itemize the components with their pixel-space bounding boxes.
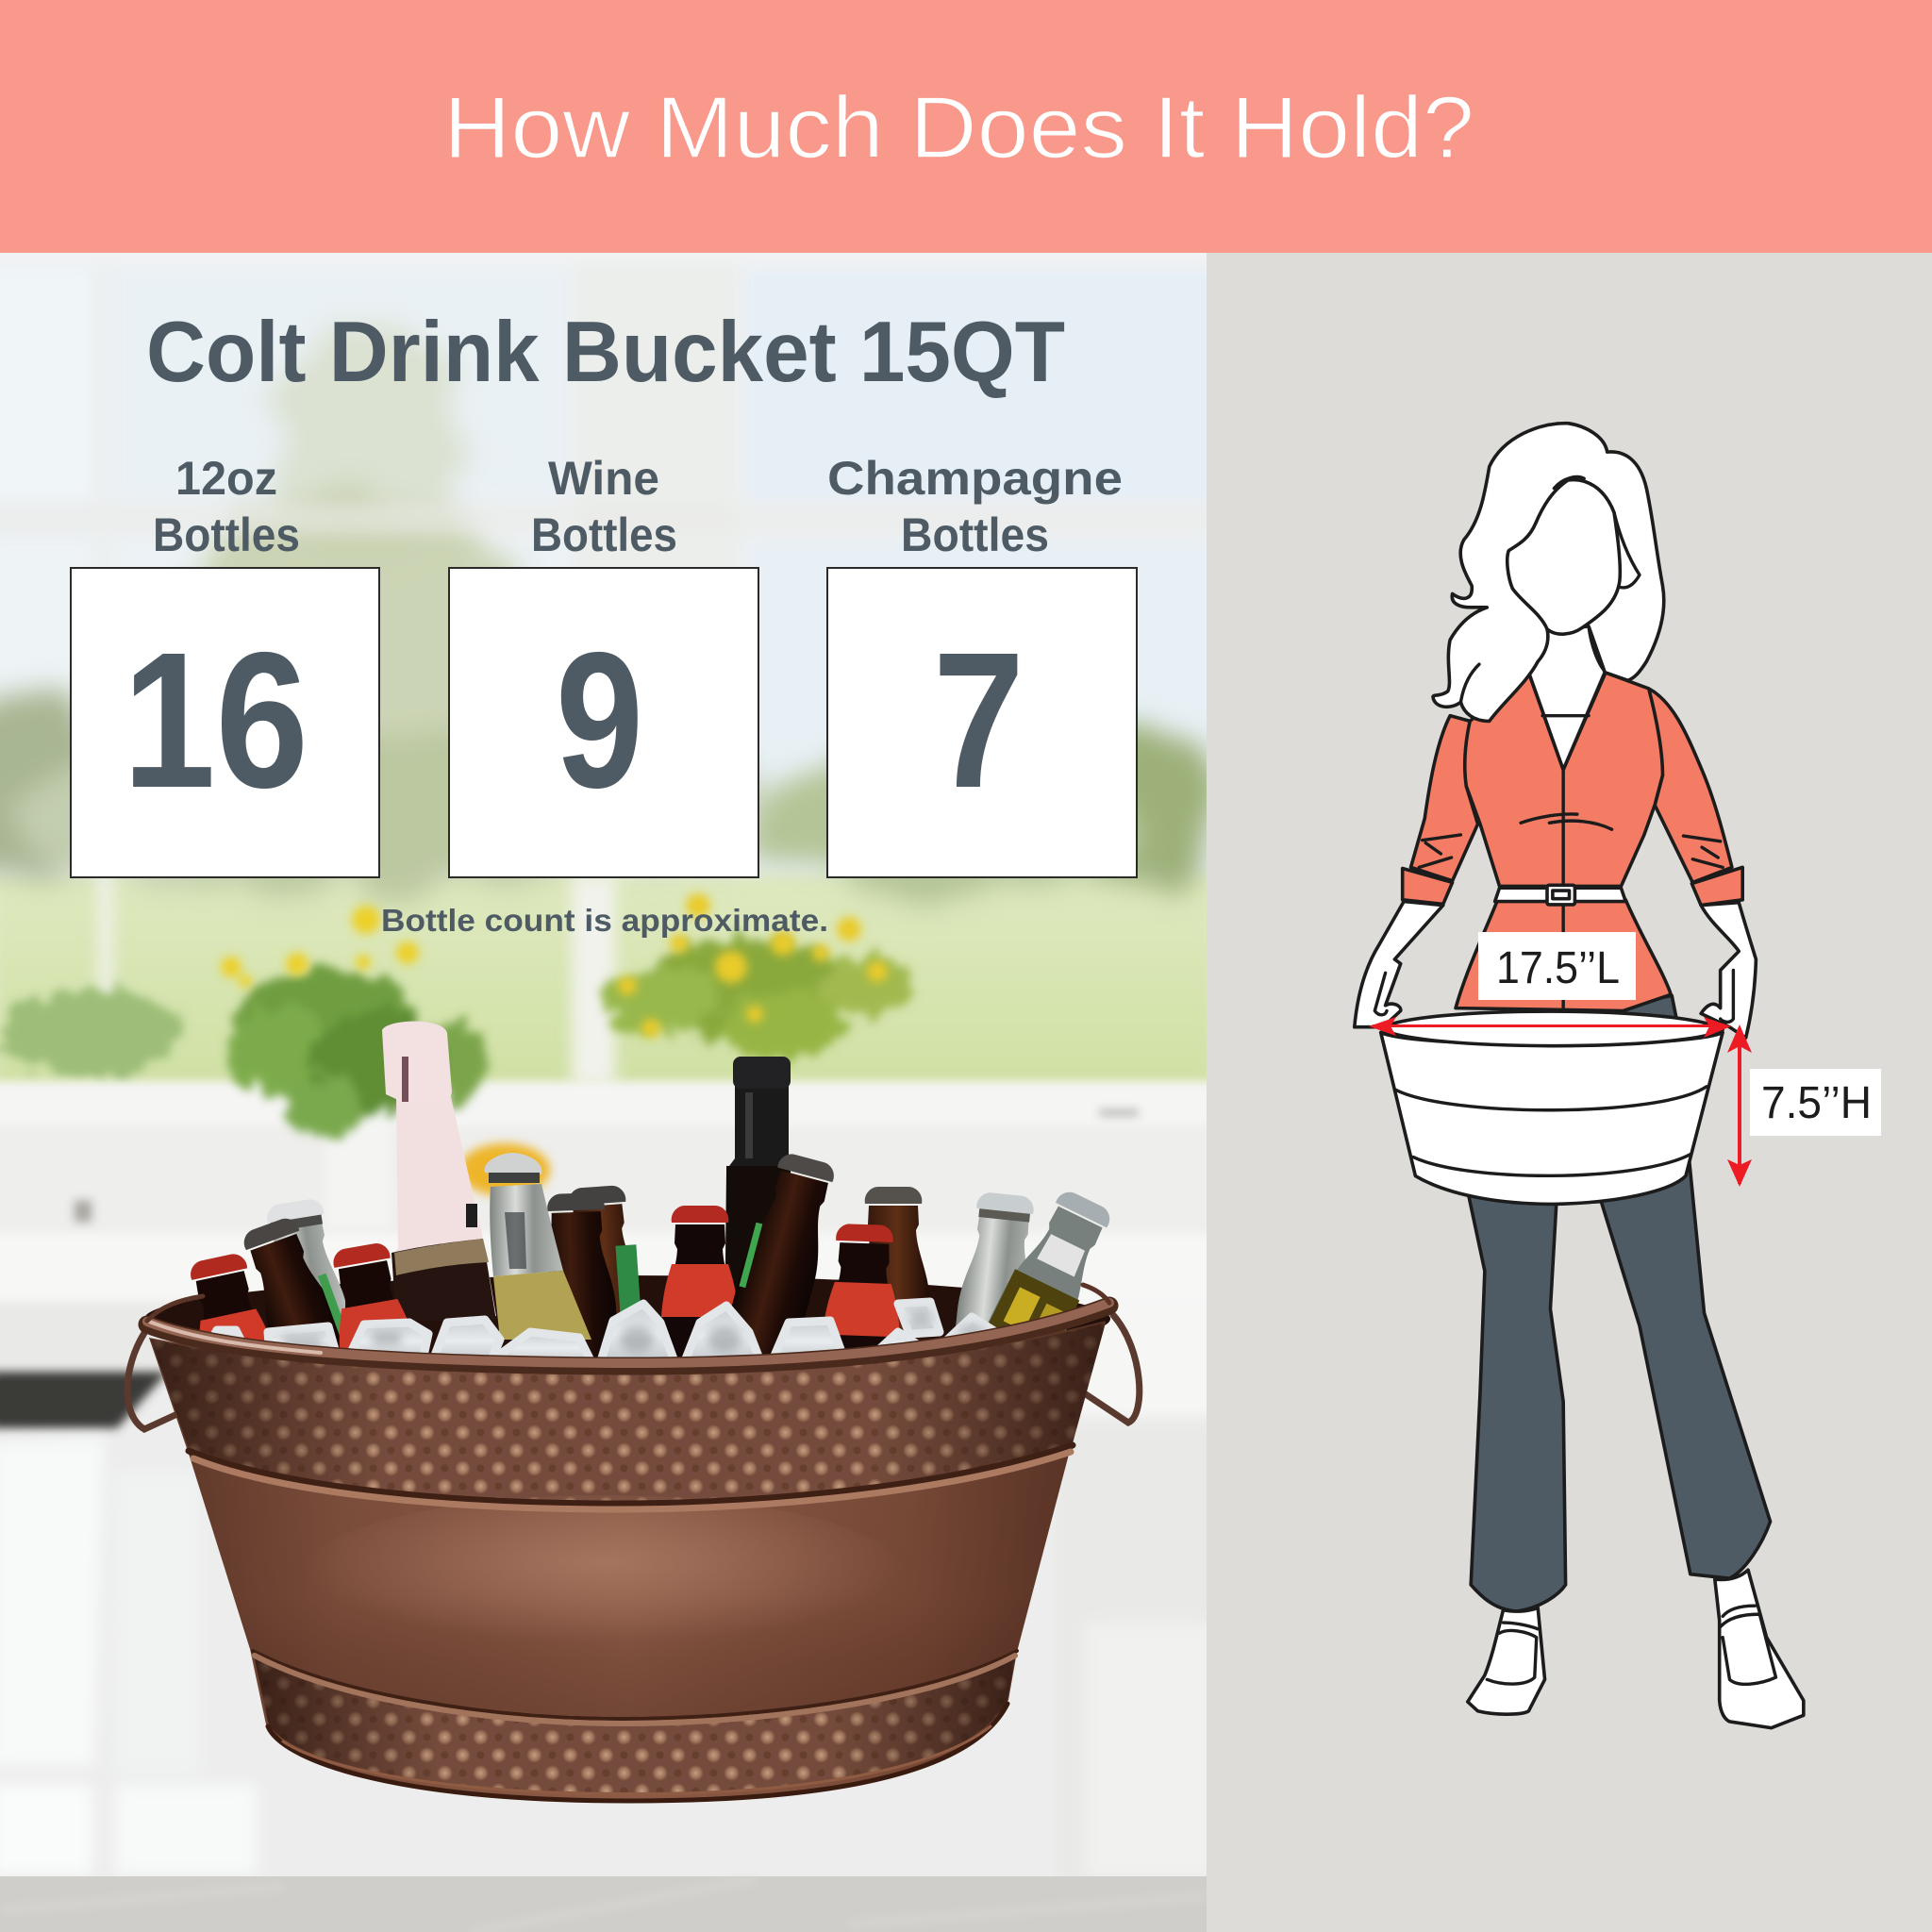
red label bottle right xyxy=(818,1224,904,1461)
right shoe xyxy=(1715,1570,1804,1728)
arrow: length xyxy=(1369,1017,1731,1038)
label: Wine Bottles xyxy=(531,452,677,561)
title: How Much Does It Hold? xyxy=(443,78,1474,176)
trousers xyxy=(1459,1149,1771,1611)
label: Champagne Bottles xyxy=(827,452,1123,561)
blurred trees xyxy=(0,321,1226,891)
undershirt and neck xyxy=(1528,626,1606,770)
label: 7.5 H: 7.5’’H xyxy=(1761,1078,1872,1128)
face xyxy=(1460,477,1640,702)
label: 12oz Bottles: 12oz xyxy=(175,452,277,505)
panel: size guide background xyxy=(1207,253,1932,1932)
lemons xyxy=(459,1143,550,1196)
clear bottle with beer xyxy=(484,1153,591,1340)
tub xyxy=(1381,1011,1723,1204)
count box: 7 xyxy=(827,568,1137,877)
wine bottle black xyxy=(724,1057,791,1340)
label: 17.5 L: 17.5’’L xyxy=(1496,943,1620,993)
hammered upper band xyxy=(151,1323,1106,1502)
count box: 9 xyxy=(449,568,758,877)
left sleeve xyxy=(1403,716,1478,904)
photo: copper bucket with bottles and ice xyxy=(127,1022,1140,1801)
shading on smooth band xyxy=(189,1447,1071,1717)
label: 12oz Bottles: Bottles xyxy=(153,508,300,561)
brown tilted bottle with green stripe xyxy=(713,1149,845,1396)
bucket body xyxy=(149,1321,1106,1800)
left hand xyxy=(1355,902,1443,1027)
flowers right xyxy=(602,893,915,1059)
panel: kitchen window photo background xyxy=(0,236,1226,1932)
ice cubes xyxy=(209,1302,1002,1366)
red label bottle center xyxy=(661,1206,739,1441)
label: Champagne Bottles: Champagne xyxy=(827,452,1123,505)
count box: 9: 9 xyxy=(556,612,643,828)
right sleeve xyxy=(1649,689,1742,906)
lower blouse xyxy=(1456,900,1676,1019)
bucket interior xyxy=(144,1275,1110,1362)
right hand xyxy=(1701,903,1756,1038)
red cap bottle 2 xyxy=(322,1240,439,1485)
rim xyxy=(147,1285,1109,1366)
label: 12oz Bottles xyxy=(153,452,300,561)
brown bottle back right xyxy=(857,1187,930,1423)
highlight on smooth band xyxy=(302,1495,906,1656)
header banner xyxy=(0,0,1932,253)
marble countertop xyxy=(0,1876,1207,1932)
flowers left xyxy=(221,906,483,1141)
bottles xyxy=(178,1022,1122,1496)
clear tilted bottle with gold xyxy=(952,1184,1122,1428)
label: Wine Bottles: Wine xyxy=(548,452,659,505)
illustration: woman holding tub xyxy=(1355,424,1804,1728)
column 1: 12oz bottles xyxy=(71,452,379,877)
dark tilted bottle with green stripe xyxy=(232,1211,384,1458)
column 2: wine bottles xyxy=(449,452,758,877)
count box: 16 xyxy=(71,568,379,877)
count box: 7: 7 xyxy=(933,612,1024,828)
wine-green label bottle behind xyxy=(559,1184,649,1424)
blouse torso xyxy=(1465,673,1662,886)
count box: 16: 16 xyxy=(123,612,308,828)
champagne bottle xyxy=(382,1022,496,1321)
red label bottle left xyxy=(178,1249,303,1496)
footnote: Bottle count is approximate. xyxy=(381,903,828,938)
label: Champagne Bottles: Bottles xyxy=(901,508,1049,561)
raised ridges xyxy=(189,1445,1073,1801)
hammered lower band xyxy=(253,1649,1017,1792)
label: Wine Bottles: Bottles xyxy=(531,508,677,561)
column 3: champagne bottles xyxy=(827,452,1137,877)
arrow: height xyxy=(1727,1024,1752,1187)
belt xyxy=(1495,885,1625,905)
dark counter strip xyxy=(0,1372,168,1428)
dark bottle front of pair xyxy=(539,1192,621,1430)
left shoe xyxy=(1468,1607,1545,1714)
ice shading xyxy=(283,1311,985,1353)
hair xyxy=(1433,424,1664,721)
small shrub left xyxy=(0,988,179,1078)
label: 17.5 L xyxy=(1478,932,1636,1000)
clear bottle back left xyxy=(257,1196,367,1441)
handles xyxy=(127,1315,1140,1429)
pants and shoes xyxy=(1459,1149,1804,1728)
clear bottle right xyxy=(945,1191,1043,1433)
heading: product name: Colt Drink Bucket 15QT xyxy=(146,305,1065,400)
label: 7.5 H xyxy=(1750,1069,1881,1136)
